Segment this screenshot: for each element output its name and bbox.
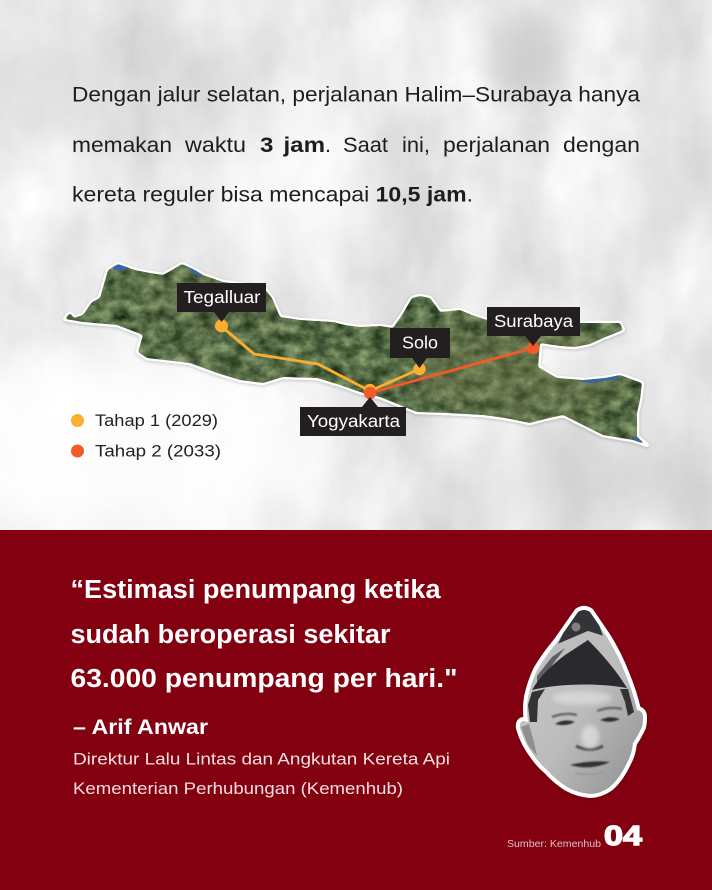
legend <box>71 412 221 460</box>
cap main <box>532 640 627 690</box>
cap upper fold <box>558 608 603 644</box>
intro text block: perjalanan <box>443 133 550 157</box>
label: Yogyakarta: Yogyakarta <box>307 411 400 431</box>
intro text block: Dengan jalur selatan, perjalanan Halim–Surabaya hanya <box>72 82 640 106</box>
intro text block: waktu <box>184 133 246 157</box>
attribution role <box>73 750 450 798</box>
intro text block: memakan <box>72 133 172 157</box>
quote text: “Estimasi penumpang ketika <box>70 576 441 604</box>
paper background <box>0 0 712 550</box>
label: Tegalluar <box>177 283 266 322</box>
marker: Yogyakarta <box>364 384 376 399</box>
quote text: 63.000 penumpang per hari." <box>70 665 458 693</box>
map of Java <box>60 260 655 450</box>
label: Tegalluar: Tegalluar <box>184 287 261 307</box>
panel: quote <box>0 530 712 890</box>
intro text block: dengan <box>563 133 640 157</box>
marker: Tegalluar <box>215 320 228 332</box>
intro text block: 3 jam <box>260 133 325 157</box>
route: tahap 2 <box>370 348 533 393</box>
intro text block: kereta reguler bisa mencapai 10,5 jam . <box>72 182 473 206</box>
attribution role: Direktur Lalu Lintas dan Angkutan Kereta Api <box>73 750 450 768</box>
intro text block <box>72 82 640 206</box>
facial features <box>552 708 622 774</box>
intro text block: Saat <box>343 133 388 157</box>
cap light band <box>527 631 632 690</box>
intro text block: . <box>325 133 331 157</box>
page number: 04 <box>604 820 643 851</box>
marker: Surabaya <box>527 342 539 354</box>
attribution name: – Arif Anwar <box>73 715 209 739</box>
quote text <box>70 576 458 693</box>
label: Yogyakarta <box>300 397 406 436</box>
label: Solo: Solo <box>402 332 438 352</box>
legend item: Tahap 1: Tahap 1 (2029) <box>95 412 218 430</box>
hair <box>528 689 634 722</box>
intro text block: ini, <box>402 133 430 157</box>
attribution role: Kementerian Perhubungan (Kemenhub) <box>73 780 403 798</box>
source note: Sumber: Kemenhub <box>507 838 601 850</box>
portrait: Arif Anwar <box>510 600 650 800</box>
cap badge <box>572 622 580 632</box>
legend item: Tahap 2: Tahap 2 (2033) <box>95 442 221 460</box>
label: Solo <box>390 328 450 368</box>
cap left fold <box>537 648 565 686</box>
label: Surabaya: Surabaya <box>494 311 573 331</box>
label: Surabaya <box>487 307 580 346</box>
route: tahap 1 <box>221 326 420 391</box>
marker: Solo <box>413 363 426 375</box>
ears shade <box>521 724 537 756</box>
quote text: sudah beroperasi sekitar <box>70 621 391 649</box>
